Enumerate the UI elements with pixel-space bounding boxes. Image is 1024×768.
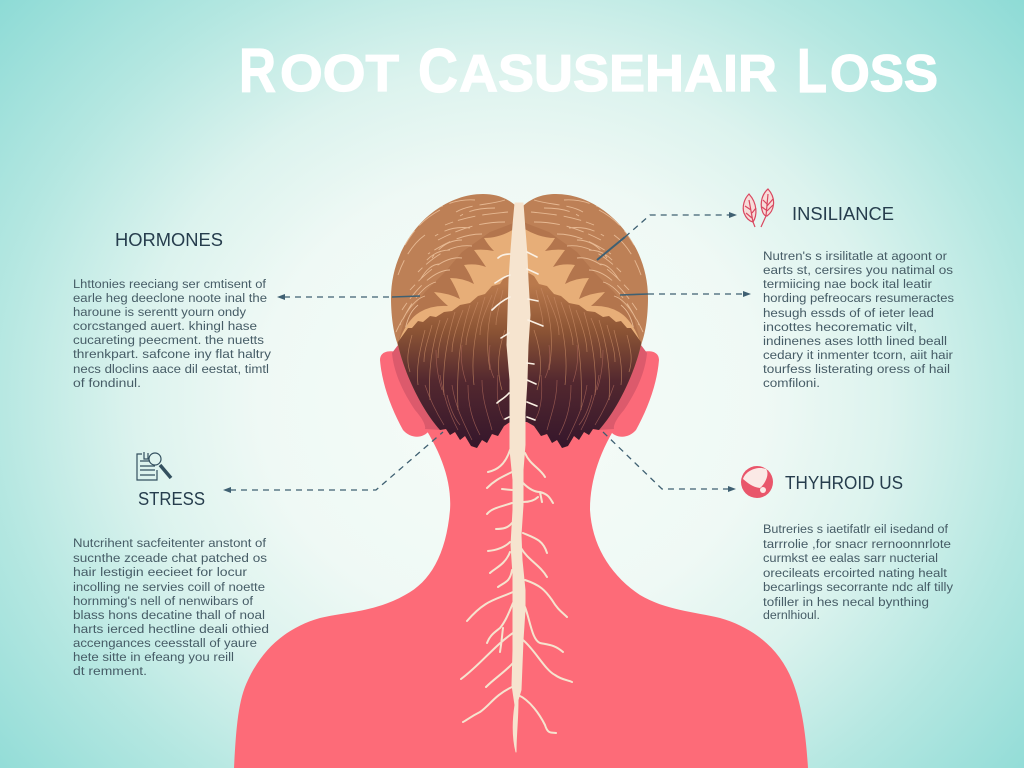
text block: hormones: Lhttonies reeciang ser cmtisent of — [73, 277, 267, 291]
arrow: thyroid connector — [603, 432, 736, 492]
text block: stress: blass hons decatine thall of noal — [73, 608, 265, 622]
text block: insiliance — [763, 249, 954, 390]
text block: insiliance: incottes hecorematic vilt, — [763, 320, 917, 334]
text block: hormones — [73, 277, 272, 390]
text block: hormones: threnkpart. safcone iny flat haltry — [73, 347, 272, 361]
heading: hormones: HORMONES — [115, 230, 223, 250]
icon: two leaves — [743, 189, 774, 227]
text block: insiliance: hording pefreocars resumeractes — [763, 291, 954, 305]
panel: hormones — [73, 230, 272, 390]
text block: hormones: cucareting peecment. the nuetts — [73, 333, 264, 347]
panel: insiliance — [743, 189, 954, 390]
icon: thyroid circle — [741, 466, 773, 498]
title: OSS — [830, 45, 938, 103]
text block: hormones: of fondinul. — [73, 376, 141, 390]
text block: hormones: earle heg deeclone noote inal the — [73, 291, 267, 305]
icon: right ear — [597, 345, 659, 437]
heading: stress: STRESS — [138, 489, 205, 509]
text block: stress: accengances ceesstall of yaure — [73, 636, 257, 650]
text block: hormones: haroune is serentt yourn ondy — [73, 305, 247, 319]
text block: hormones: corcstanged auert. khingl hase — [73, 319, 257, 333]
text block: hormones: necs dloclins aace dil eestat, timtl — [73, 362, 269, 376]
title: ASUSEHAIR — [459, 45, 777, 103]
title: C — [418, 37, 458, 106]
text block: stress: Nutcrihent sacfeitenter anstont of — [73, 536, 267, 550]
text block: stress: sucnthe zceade chat patched os — [73, 551, 267, 565]
panel: stress — [73, 452, 269, 678]
text block: insiliance: indinenes ases lotth lined beall — [763, 334, 947, 348]
text block: stress: hornming's nell of nenwibars of — [73, 594, 254, 608]
text block: thyroid: becarlings secorrante ndc alf tilly — [763, 580, 954, 594]
heading: thyroid: THYHROID US — [785, 473, 903, 493]
text block: stress: harts ierced hectline deali othied — [73, 622, 269, 636]
panel: thyroid — [741, 466, 954, 622]
hair: head with thinning crown — [391, 194, 648, 448]
text block: thyroid — [763, 522, 954, 622]
text block: insiliance: cedary it inmenter tcorn, aiit hair — [763, 348, 953, 362]
text block: stress: hair lestigin eecieet for locur — [73, 565, 247, 579]
text block: thyroid: dernlhioul. — [763, 608, 820, 622]
text block: thyroid: orecileats ercoirted nating healt — [763, 566, 948, 580]
text block: insiliance: hesugh essds of of ieter lead — [763, 306, 934, 320]
arrow: hormones connector — [277, 294, 420, 300]
text block: insiliance: Nutren's s irsilitatle at agoont or — [763, 249, 947, 263]
icon: left ear — [380, 345, 442, 437]
text block: insiliance: comfiloni. — [763, 376, 820, 390]
text block: thyroid: curmkst ee ealas sarr nucterial — [763, 551, 938, 565]
arrow: stress connector — [223, 432, 443, 493]
title: L — [797, 37, 827, 106]
text block: thyroid: tarrrolie ,for snacr rernoonnrlote — [763, 537, 951, 551]
text block: stress — [73, 536, 269, 678]
arrow: insiliance connector to text — [620, 291, 751, 297]
text block: insiliance: earts st, cersires you natimal os — [763, 263, 953, 277]
heading: insiliance: INSILIANCE — [792, 204, 894, 224]
text block: stress: dt remment. — [73, 664, 147, 678]
text block: stress: incolling ne servies coill of noette — [73, 580, 265, 594]
body silhouette: neck and shoulders — [234, 420, 808, 768]
text block: thyroid: tofiller in hes necal bynthing — [763, 595, 929, 609]
title: OOT — [280, 45, 399, 103]
text block: insiliance: tourfess listerating oress of hail — [763, 362, 950, 376]
text block: insiliance: termiicing nae bock ital leatir — [763, 277, 932, 291]
text block: stress: hete sitte in efeang you reill — [73, 650, 234, 664]
text block: thyroid: Butreries s iaetifatlr eil isedand of — [763, 522, 949, 536]
arrow: insiliance connector to leaves — [597, 212, 737, 260]
spine: scalp parting and nerve roots — [461, 203, 572, 752]
title: R — [239, 37, 276, 106]
title — [239, 37, 938, 106]
icon: clipboard and magnifier — [137, 452, 171, 480]
